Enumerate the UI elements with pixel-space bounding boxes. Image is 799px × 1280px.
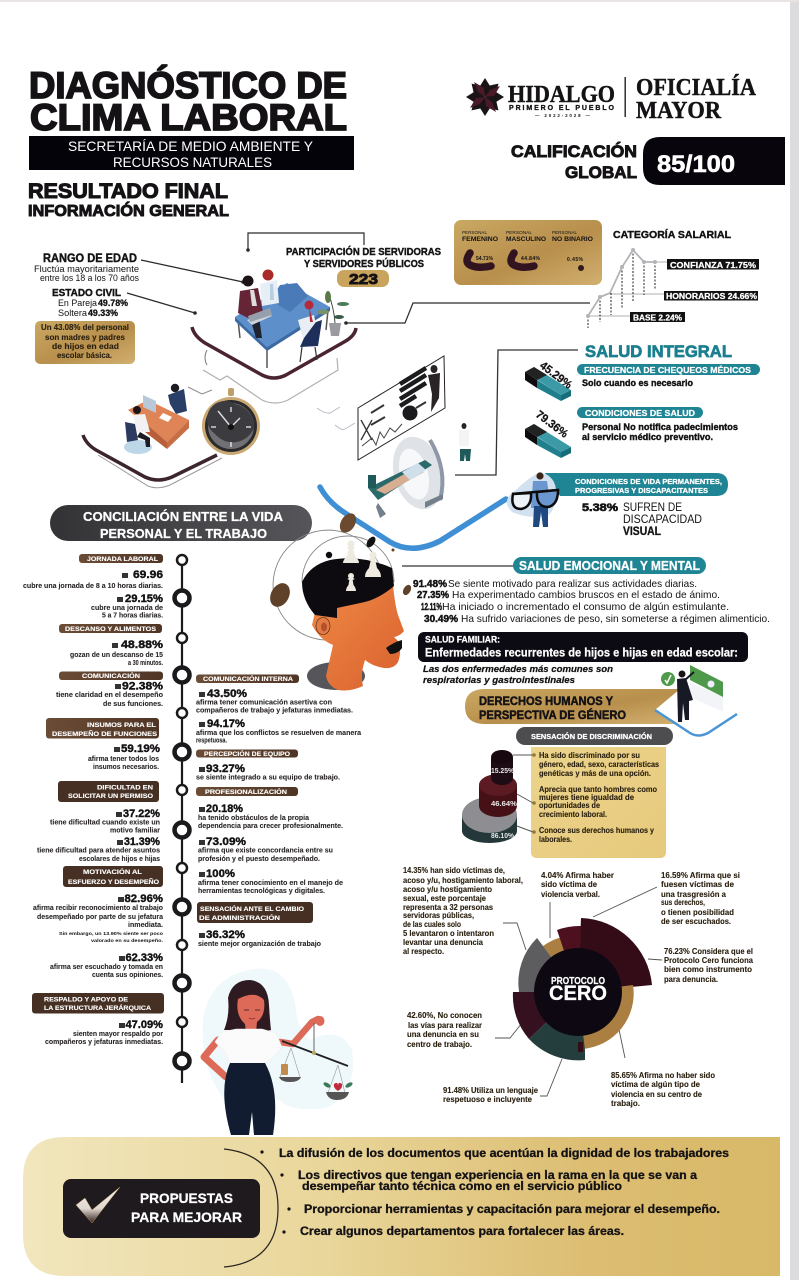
gender panel: FEMENINO	[462, 237, 498, 243]
respaldo: sienten mayor respaldo por	[73, 1031, 163, 1038]
heading: salud integral: SALUD INTEGRAL	[585, 342, 732, 361]
gender panel: 54.71%	[476, 256, 494, 262]
text block: age range and civil status: RANGO DE EDAD	[43, 253, 137, 265]
chart: no binario	[578, 265, 584, 271]
panel: health conditions	[525, 407, 738, 458]
connectors	[495, 887, 662, 1096]
text: 85.65%: 85.65% Afirma no haber sido	[611, 1071, 715, 1080]
plant	[317, 291, 349, 336]
bar: 79.36%: 79.36%	[533, 409, 570, 441]
text block: emotional health stats: 91.48%	[413, 579, 447, 590]
panel: medical checkups: Solo cuando es necesario	[582, 378, 693, 389]
jornada laboral: JORNADA LABORAL	[87, 556, 158, 563]
text: common diseases: Las dos enfermedades más comunes son	[423, 664, 613, 675]
insumos: INSUMOS PARA EL	[87, 722, 156, 729]
panel: health conditions: Personal No notifica padecimientos	[582, 422, 738, 433]
respaldo	[32, 993, 164, 1046]
dificultad: escolares de hijos e hijas	[79, 856, 160, 863]
text: 14.35%: servidoras públicas,	[403, 911, 474, 920]
text block: age range and civil status: ESTADO CIVIL	[52, 287, 122, 299]
panel: discrimination details: Conoce sus derechos humanos y	[539, 826, 654, 835]
text block: emotional health stats: 30.49%	[424, 614, 458, 625]
scanner	[368, 431, 451, 518]
comunicación: tiene claridad en el desempeño	[56, 692, 163, 699]
profesionalización	[196, 787, 343, 895]
percepción de equipo	[196, 749, 340, 782]
jornada laboral: cubre una jornada de	[91, 605, 163, 612]
text: 16.59%: sus derechos,	[661, 898, 705, 907]
gender panel: PERSONAL	[552, 230, 577, 235]
motivación: 82.96%	[124, 893, 163, 905]
chart: protocolo cero radial	[495, 887, 662, 1096]
sensación ante el cambio	[197, 902, 321, 948]
chart: salary category: HONORARIOS 24.66%	[666, 292, 757, 301]
text: 85.65%: víctima de algún tipo de	[611, 1080, 701, 1089]
respaldo: RESPALDO Y APOYO DE	[44, 996, 129, 1004]
panel: discrimination details: mujeres tiene igualdad de	[539, 793, 635, 802]
chart: salary category	[586, 228, 759, 328]
connector: medical to health	[455, 350, 578, 475]
text: 76.23%: bien como instrumento	[664, 965, 752, 974]
descanso y alimentos: DESCANSO Y ALIMENTOS	[65, 626, 157, 633]
hair	[224, 980, 271, 1034]
comunicación: COMUNICACIÓN	[82, 671, 140, 680]
dificultad: DIFICULTAD EN	[97, 784, 153, 792]
text: 14.35%: acoso y/u hostigamiento	[403, 885, 492, 894]
comunicación interna: afirma que los conflictos se resuelven de manera	[196, 730, 361, 737]
heading: conciliación: CONCILIACIÓN ENTRE LA VIDA	[83, 509, 284, 524]
dificultad: 37.22%	[123, 808, 160, 820]
text: 4.04%: violencia verbal.	[541, 890, 600, 899]
section heading: resultado final: RESULTADO FINAL	[28, 180, 228, 203]
sensación ante el cambio: SENSACIÓN ANTE EL CAMBIO	[200, 904, 304, 913]
panel: health conditions: CONDICIONES DE SALUD	[585, 408, 695, 418]
descanso y alimentos	[59, 624, 163, 667]
jornada laboral: 29.15%	[125, 593, 163, 605]
list of proposals: Crear algunos departamentos para fortalecer las áreas.	[300, 1226, 624, 1238]
icon: stopwatch	[202, 388, 260, 455]
panel: salud familiar: SALUD FAMILIAR:	[425, 634, 500, 646]
panel: disability: VISUAL	[623, 526, 661, 538]
text block: age range and civil status	[34, 253, 139, 318]
text block: age range and civil status: Fluctúa mayoritariamente	[34, 264, 139, 275]
sub-heading: discrimination: SENSACIÓN DE DISCRIMINACIÓN	[531, 732, 652, 741]
face and neck	[312, 585, 404, 690]
panel: salud familiar: Enfermedades recurrentes de hijos e hijas en edad escolar:	[425, 648, 738, 660]
text: 14.35%: sexual, este porcentaje	[403, 894, 487, 903]
comunicación interna: COMUNICACIÓN INTERNA	[203, 674, 293, 683]
text: 14.35%	[403, 866, 523, 956]
percepción de equipo: 93.27%	[206, 763, 245, 775]
text: 14.35%: de las cuales solo	[403, 920, 461, 929]
chart: protocolo cero radial: PROTOCOLO	[551, 976, 605, 987]
sector: 4.04%	[543, 937, 578, 992]
trousers	[224, 1063, 275, 1135]
text: 16.59%: una trasgresión a	[661, 890, 727, 899]
chart: masculino	[511, 253, 534, 267]
text: 14.35%: 14.35% han sido víctimas de,	[403, 866, 505, 875]
monitor	[143, 395, 156, 413]
face	[237, 995, 264, 1032]
chart: stacked cylinders: 86.10%	[491, 831, 514, 840]
arms	[204, 1040, 226, 1077]
profesionalización: herramientas tecnológicas y digitales.	[198, 888, 325, 895]
panel: disability: PROGRESIVAS Y DISCAPACITANTES	[575, 486, 708, 495]
illustration: MRI scan	[317, 356, 471, 518]
center disc	[534, 948, 622, 1036]
gender panel: 44.84%	[521, 256, 541, 262]
connector: emotional health	[402, 565, 514, 567]
gender panel: NO BINARIO	[552, 237, 593, 243]
jornada laboral: 5 a 7 horas diarias.	[102, 612, 163, 620]
list of proposals: Proporcionar herramientas y capacitación para mejorar el desempeño.	[304, 1204, 720, 1216]
text block: age range and civil status: 49.78%	[98, 298, 128, 308]
heading: derechos humanos: PERSPECTIVA DE GÉNERO	[479, 707, 626, 722]
shadow	[307, 662, 365, 690]
global score	[511, 137, 785, 185]
text: 42.60%: las vías para realizar	[408, 1021, 482, 1030]
profesionalización: dependencia para crecer profesionalmente.	[198, 823, 343, 830]
callout: parents: de hijos en edad	[52, 342, 119, 351]
panel: disability	[507, 472, 728, 538]
connector lines: general information	[127, 233, 590, 324]
comunicación interna: respetuosa.	[196, 738, 227, 744]
global score: GLOBAL	[565, 163, 637, 182]
heading: conciliación	[50, 505, 312, 541]
profesionalización: ha tenido obstáculos de la propia	[198, 815, 309, 822]
illustration: head with chess pieces	[266, 510, 413, 690]
panel: salud familiar	[418, 632, 748, 662]
text block: age range and civil status: En Pareja	[58, 298, 97, 308]
text block: emotional health stats: Ha iniciado o incrementado el consumo de algún estimulante.	[442, 601, 729, 613]
motivación: 62.33%	[126, 952, 163, 964]
panel: discrimination details: Ha sido discriminado por su	[539, 751, 640, 760]
logo: Hidalgo: — 2022-2028 —	[535, 113, 590, 118]
doctor	[459, 423, 471, 461]
profesionalización: 73.09%	[206, 836, 246, 848]
participation: 223	[349, 271, 378, 288]
profesionalización: profesión y el puesto desempeñado.	[198, 856, 320, 863]
motivación: cuenta sus opiniones.	[92, 972, 163, 979]
dificultad: SOLICITAR UN PERMISO	[68, 793, 153, 800]
shirt	[215, 1029, 282, 1063]
button	[63, 1179, 260, 1238]
gender panel	[454, 220, 602, 285]
illustration: woman with scales	[203, 969, 353, 1135]
panel: discrimination details: genéticas y más de una opción.	[539, 769, 651, 778]
sector: 14.35%	[518, 938, 578, 992]
illustration: meeting on platform	[192, 270, 356, 403]
logo: Hidalgo: PRIMERO EL PUEBLO	[509, 105, 615, 112]
ear	[316, 618, 330, 634]
jornada laboral: 69.96	[133, 569, 163, 581]
motivación: inmediata.	[128, 922, 163, 929]
title	[29, 64, 347, 138]
bar: 79.36%	[525, 409, 571, 458]
insumos: 59.19%	[121, 743, 160, 755]
comunicación: 92.38%	[122, 680, 163, 692]
subtitle banner: RECURSOS NATURALES	[113, 154, 272, 170]
text: common diseases	[423, 664, 613, 686]
insumos	[46, 718, 160, 771]
jornada laboral: cubre una jornada de 8 a 10 horas diarias.	[23, 583, 163, 590]
text block: emotional health stats	[413, 578, 770, 625]
callout: parents	[35, 321, 135, 364]
text: 91.48%	[443, 1086, 539, 1104]
text: 14.35%: acoso y/u, hostigamiento laboral,	[403, 876, 523, 885]
icon: Hidalgo star	[466, 78, 504, 116]
profesionalización: afirma tener conocimiento en el manejo de	[198, 880, 343, 887]
sector: 76.23%	[578, 918, 652, 992]
column: right statistics	[196, 674, 361, 948]
text: 16.59%: 16.59% Afirma que si	[661, 871, 740, 880]
blue curve	[320, 487, 506, 548]
insumos: afirma tener todos los	[88, 756, 159, 763]
respaldo: 47.09%	[126, 1019, 163, 1031]
text block: emotional health stats: Ha sufrido variaciones de peso, sin someterse a régimen alimenticio.	[461, 613, 770, 625]
logo: Oficialía Mayor: OFICIALÍA	[636, 75, 757, 101]
text: 76.23%: 76.23% Considera que el	[664, 947, 753, 956]
heading: salud emocional: SALUD EMOCIONAL Y MENTAL	[519, 558, 700, 573]
chart: salary category: BASE 2.24%	[633, 314, 682, 322]
panel: disability: CONDICIONES DE VIDA PERMANENTES,	[575, 477, 722, 486]
text: 42.60%	[407, 1011, 482, 1049]
comunicación interna: 43.50%	[207, 688, 247, 700]
text: 42.60%: una denuncia en su	[407, 1030, 479, 1039]
panel: discrimination details: género, edad, sexo, características	[539, 760, 659, 769]
panel: disability: SUFREN DE	[623, 502, 682, 514]
illustration: office desk and stopwatch	[83, 384, 260, 488]
chart: salary category: CONFIANZA 71.75%	[670, 260, 756, 270]
timeline	[174, 555, 190, 1083]
section heading: resultado final: INFORMACIÓN GENERAL	[28, 202, 229, 220]
text: 14.35%: 5 levantaron o intentaron	[403, 929, 494, 938]
descanso y alimentos: 48.88%	[121, 639, 163, 651]
text block: emotional health stats: 12.11%	[421, 602, 442, 613]
descanso y alimentos: a 30 minutos.	[128, 660, 163, 667]
panel: discrimination details: laborales.	[539, 835, 572, 844]
motivación: desempeñado por parte de su jefatura	[37, 914, 163, 921]
panel: propuestas para mejorar	[23, 1137, 780, 1276]
chart: femenino	[467, 253, 491, 267]
comunicación: de sus funciones.	[103, 701, 163, 708]
text: 14.35%: levantar una denuncia	[403, 938, 484, 947]
text block: age range and civil status: entre los 18 a los 70 años	[40, 273, 139, 284]
heading: conciliación: PERSONAL Y EL TRABAJO	[100, 526, 267, 541]
dificultad: motivo familiar	[110, 828, 160, 834]
dificultad: 31.39%	[124, 836, 160, 848]
comunicación interna	[196, 674, 361, 744]
respaldo: compañeros y jefaturas inmediatas.	[45, 1039, 163, 1046]
logo: Hidalgo: HIDALGO	[508, 82, 615, 108]
gender panel: 0.45%	[567, 257, 584, 263]
panel: disability: DISCAPACIDAD	[623, 514, 702, 526]
text block: emotional health stats: 27.35%	[417, 590, 449, 601]
chess pawns	[343, 540, 381, 591]
comunicación interna: compañeros de trabajo y jefaturas inmediatas.	[196, 708, 353, 714]
callout: parents: escolar básica.	[57, 351, 112, 360]
callout: parents: Un 43.08% del personal	[41, 323, 129, 332]
text: common diseases: respiratorias y gastrointestinales	[423, 675, 575, 686]
comunicación interna: afirma tener comunicación asertiva con	[196, 700, 332, 706]
gender panel: MASCULINO	[506, 237, 546, 243]
chart: stacked cylinders	[462, 750, 536, 843]
descanso y alimentos: gozan de un descanso de 15	[70, 652, 163, 659]
dificultad	[37, 781, 160, 863]
text: 16.59%: o tienen posibilidad	[661, 908, 734, 917]
logo: Hidalgo	[466, 78, 615, 118]
panel: discrimination details: crecimiento laboral.	[539, 810, 607, 819]
desk	[128, 400, 189, 442]
panel: discrimination details	[531, 747, 666, 858]
seated person	[298, 300, 322, 362]
illustration: person at sign	[655, 665, 737, 736]
text: 14.35%: al respecto.	[403, 947, 444, 956]
sector: 85.65%	[578, 985, 634, 1049]
text: 42.60%: centro de trabajo.	[407, 1040, 472, 1049]
button: PARA MEJORAR	[131, 1209, 242, 1225]
text: 91.48%: respetuoso e incluyente	[443, 1095, 533, 1104]
percepción de equipo: PERCEPCIÓN DE EQUIPO	[204, 749, 290, 758]
comunicación	[56, 671, 163, 708]
chart: stacked cylinders: 15.25%	[491, 766, 514, 775]
medical panel	[358, 356, 445, 460]
subtitle banner: SECRETARÍA DE MEDIO AMBIENTE Y	[68, 138, 314, 154]
logo: Oficialía Mayor	[636, 75, 757, 124]
insumos: insumos necesarios.	[93, 764, 159, 771]
insumos: DESEMPEÑO DE FUNCIONES	[52, 729, 158, 738]
text: 42.60%: 42.60%, No conocen	[407, 1011, 482, 1020]
profesionalización: 100%	[206, 868, 235, 880]
text: 16.59%	[661, 871, 740, 926]
sector: 42.60%	[513, 992, 578, 1039]
respaldo: LA ESTRUCTURA JERÁRQUICA	[44, 1003, 151, 1012]
panel: discrimination details: oportunidades de	[539, 801, 600, 810]
motivación: afirma recibir reconocimiento al trabajo	[33, 905, 163, 912]
participation	[286, 245, 441, 288]
panel: medical checkups	[525, 360, 760, 401]
hair	[302, 558, 394, 618]
text block: age range and civil status: Soltera	[58, 308, 87, 318]
title: CLIMA LABORAL	[30, 97, 347, 138]
percepción de equipo: se siente integrado a su equipo de trabajo.	[196, 774, 340, 782]
laptop	[247, 312, 272, 325]
sector: 91.48%	[529, 992, 585, 1060]
text: 91.48%: 91.48% Utiliza un lenguaje	[443, 1086, 539, 1095]
gender panel: PERSONAL	[462, 230, 487, 235]
icon: person with glasses	[507, 472, 558, 527]
text: 85.65%: violencia en su centro de	[611, 1090, 703, 1099]
motivación: afirma ser escuchado y tomada en	[50, 964, 163, 971]
text: 76.23%: Protocolo Cero funciona	[664, 956, 754, 965]
text block: age range and civil status: 49.33%	[88, 308, 118, 318]
motivación: ESFUERZO Y DESEMPEÑO	[68, 877, 159, 886]
divider line in logo	[624, 77, 626, 117]
motivación	[33, 866, 163, 979]
text: 4.04%	[541, 871, 614, 899]
panel: medical checkups: FRECUENCIA DE CHEQUEOS MÉDICOS	[584, 365, 751, 375]
text: 85.65%: trabajo.	[611, 1099, 640, 1108]
text: 76.23%	[664, 947, 754, 984]
meeting table	[238, 310, 328, 368]
panel: health conditions: al servicio médico preventivo.	[582, 432, 713, 443]
sub-heading: discrimination	[516, 727, 673, 745]
list of proposals: desempeñar tanto técnica como en el servicio público	[302, 1181, 622, 1193]
chart: protocolo cero radial: CERO	[549, 982, 607, 1005]
sensación ante el cambio: DE ADMINISTRACIÓN	[199, 913, 280, 922]
motivación: MOTIVACIÓN AL	[83, 867, 142, 876]
chart: stacked cylinders: 46.64%	[491, 799, 517, 808]
dificultad: tiene dificultad cuando existe un	[50, 820, 160, 826]
heading: derechos humanos: DERECHOS HUMANOS Y	[479, 694, 613, 708]
list of proposals	[260, 1148, 729, 1238]
panel: disability: 5.38%	[582, 502, 618, 514]
chart: salary category: CATEGORÍA SALARIAL	[613, 228, 732, 241]
comunicación interna: 94.17%	[207, 718, 245, 730]
scale	[279, 1023, 353, 1100]
motivación: Sin embargo, un 13.90% siente ser poco	[59, 931, 163, 937]
sensación ante el cambio: siente mejor organización de trabajo	[198, 941, 321, 948]
text: 14.35%: representa a 32 personas	[403, 903, 494, 912]
jornada laboral	[23, 554, 163, 620]
icon: check	[76, 1187, 120, 1223]
button: PROPUESTAS	[140, 1190, 233, 1206]
participation: PARTICIPACIÓN DE SERVIDORAS	[286, 245, 441, 258]
person in white shirt	[260, 270, 279, 306]
list of proposals: La difusión de los documentos que acentúan la dignidad de los trabajadores	[279, 1148, 729, 1160]
list of proposals: Los directivos que tengan experiencia en la rama en la que se van a	[298, 1170, 698, 1182]
bar: 45.29%	[525, 360, 574, 401]
column: left statistics	[23, 554, 164, 1046]
global score: 85/100	[657, 151, 735, 178]
manager	[168, 384, 187, 414]
profesionalización: afirma que existe concordancia entre su	[198, 848, 333, 854]
motivación: valorado en su desempeño.	[91, 938, 163, 944]
text: 4.04%: sido víctima de	[541, 880, 598, 889]
text: 76.23%: para denuncia.	[664, 975, 718, 984]
profesionalización: 20.18%	[206, 803, 243, 815]
title: DIAGNÓSTICO DE	[29, 64, 347, 106]
text: 16.59%: fuesen víctimas de	[661, 880, 735, 889]
heading: derechos humanos	[465, 689, 680, 724]
seated employee	[124, 406, 152, 454]
gender panel: PERSONAL	[506, 230, 533, 235]
text: 85.65%	[611, 1071, 715, 1108]
text: 4.04%: 4.04% Afirma haber	[541, 871, 614, 880]
global score: CALIFICACIÓN	[511, 142, 637, 161]
participation: Y SERVIDORES PÚBLICOS	[304, 257, 424, 270]
sector: 16.59%	[557, 926, 581, 992]
profesionalización: PROFESIONALIZACIÓN	[205, 787, 287, 796]
subtitle banner	[29, 136, 354, 170]
text block: emotional health stats: Ha experimentado cambios bruscos en el estado de ánimo.	[452, 589, 720, 601]
panel: discrimination details: Aprecia que tanto hombres como	[539, 785, 657, 794]
sensación ante el cambio: 36.32%	[206, 929, 245, 941]
bar: 45.29%: 45.29%	[537, 360, 574, 392]
logo: Oficialía Mayor: MAYOR	[636, 98, 722, 124]
section heading: resultado final	[28, 180, 229, 220]
text block: emotional health stats: Se siente motivado para realizar sus actividades diarias.	[448, 578, 697, 590]
mustache	[386, 640, 402, 654]
text: 16.59%: de ser escuchados.	[661, 917, 731, 926]
dificultad: tiene dificultad para atender asuntos	[37, 848, 160, 854]
callout: parents: son madres y padres	[45, 333, 126, 342]
person in maroon suit	[238, 276, 263, 338]
